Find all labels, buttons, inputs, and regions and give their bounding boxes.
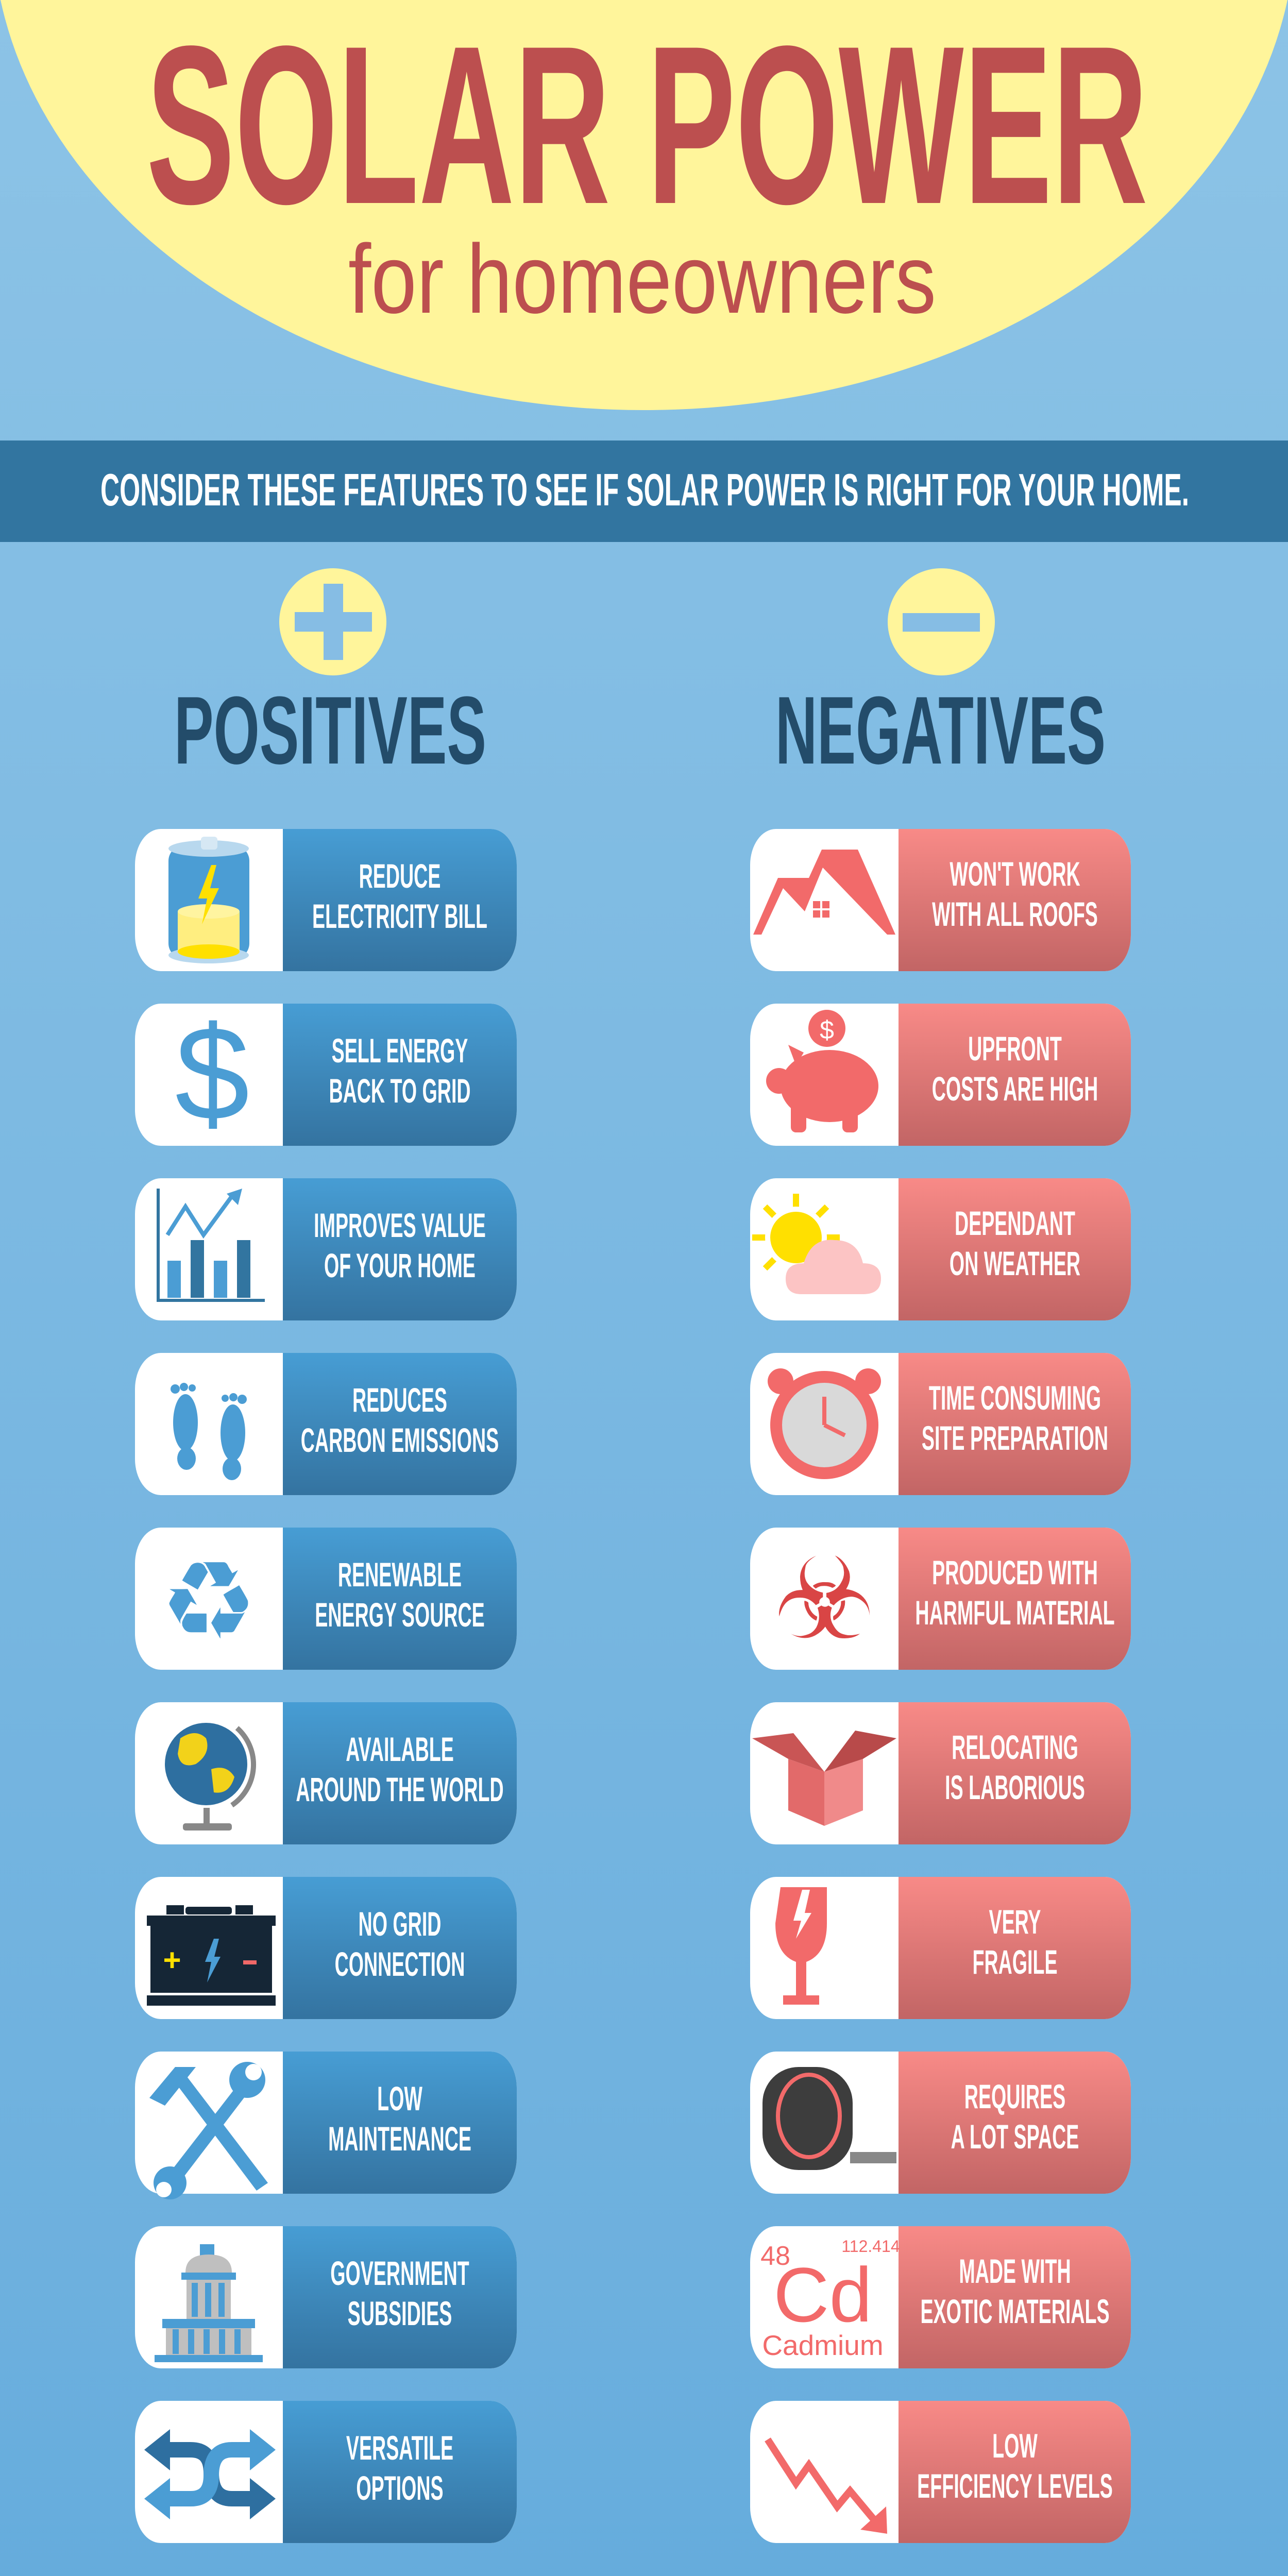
card: low maintenance	[135, 2052, 517, 2199]
card: renewable	[135, 1528, 517, 1670]
panel: positives bottom	[135, 1702, 517, 2543]
icon: piggy bank: $	[820, 1015, 834, 1044]
header section	[0, 0, 1288, 784]
icon: cadmium element	[760, 2237, 900, 2361]
card: time consuming: TIME CONSUMING	[929, 1379, 1101, 1417]
icon: biohazard: ☣	[773, 1536, 875, 1663]
card: harmful material: PRODUCED WITH	[932, 1554, 1098, 1592]
card: carbon emissions: REDUCES	[352, 1381, 447, 1419]
card: available world: AVAILABLE	[346, 1731, 454, 1769]
card: no grid	[135, 1877, 517, 2019]
icon: cadmium element: 112.414	[841, 2237, 900, 2256]
card: low maintenance: LOW	[377, 2080, 422, 2118]
card: time consuming	[750, 1353, 1131, 1495]
heading: positives: POSITIVES	[174, 676, 486, 784]
card: cadmium: MADE WITH	[959, 2252, 1071, 2291]
card: reduce electricity bill: ELECTRICITY BILL	[312, 897, 487, 936]
card: upfront costs: COSTS ARE HIGH	[932, 1070, 1098, 1108]
icon: tape measure	[762, 2067, 896, 2170]
card: fragile: VERY	[989, 1903, 1041, 1941]
card: low maintenance: MAINTENANCE	[328, 2120, 471, 2158]
card: roofs: WITH ALL ROOFS	[932, 895, 1098, 934]
cards section 2	[135, 1702, 1131, 2543]
card: government	[135, 2226, 517, 2368]
icon: alarm clock	[768, 1368, 881, 1479]
icon: chart	[157, 1189, 265, 1302]
card: efficiency: EFFICIENCY LEVELS	[917, 2467, 1113, 2505]
card: fragile	[750, 1877, 1131, 2019]
card: relocating: IS LABORIOUS	[945, 1769, 1085, 1807]
card: fragile: FRAGILE	[972, 1943, 1058, 1981]
card: efficiency: LOW	[992, 2427, 1038, 2465]
card: no grid: NO GRID	[359, 1905, 441, 1943]
card: weather: ON WEATHER	[950, 1245, 1080, 1283]
banner	[0, 440, 1288, 542]
icon: footprints	[171, 1383, 247, 1480]
icon: globe	[165, 1723, 253, 1831]
icon: roof	[753, 850, 895, 935]
card: versatile: OPTIONS	[356, 2469, 444, 2507]
card: available world	[135, 1702, 517, 1844]
card: space: A LOT SPACE	[951, 2118, 1079, 2156]
icon: sun and cloud	[752, 1194, 881, 1294]
card: time consuming: SITE PREPARATION	[922, 1419, 1108, 1458]
card: renewable: RENEWABLE	[338, 1556, 462, 1594]
panel: negatives top	[750, 829, 1131, 1670]
icon: cadmium element: Cd	[773, 2251, 872, 2338]
card: relocating: RELOCATING	[952, 1728, 1078, 1767]
icon: down arrow	[768, 2439, 887, 2534]
panel: negatives bottom	[750, 1702, 1131, 2543]
icon: box	[752, 1731, 896, 1826]
icon: minus	[888, 568, 995, 675]
card: roofs	[750, 829, 1131, 971]
icon: tools	[149, 2062, 268, 2199]
card: versatile	[135, 2401, 517, 2543]
subtitle: for homeowners	[348, 225, 936, 334]
icon: cadmium element: Cadmium	[762, 2329, 884, 2361]
card: weather	[750, 1178, 1131, 1320]
card: sell energy	[135, 999, 517, 1148]
panel: positives top	[135, 829, 517, 1670]
card: carbon emissions	[135, 1353, 517, 1495]
icon: recycle: ♻	[160, 1540, 257, 1662]
card: improves value: OF YOUR HOME	[324, 1247, 476, 1285]
card: available world: AROUND THE WORLD	[296, 1771, 504, 1809]
cards section 1	[135, 829, 1131, 1670]
card: carbon emissions: CARBON EMISSIONS	[301, 1421, 499, 1460]
icon: capitol	[155, 2244, 263, 2362]
card: cadmium: EXOTIC MATERIALS	[920, 2293, 1110, 2331]
icon: dollar: $	[175, 999, 249, 1148]
icon: piggy bank	[766, 1010, 878, 1132]
sun header	[0, 0, 1288, 410]
card: versatile: VERSATILE	[346, 2429, 453, 2467]
card: relocating	[750, 1702, 1131, 1844]
card: space: REQUIRES	[964, 2078, 1065, 2116]
card: reduce electricity bill: REDUCE	[359, 857, 440, 895]
card: cadmium	[750, 2226, 1131, 2368]
card: government: GOVERNMENT	[330, 2255, 469, 2293]
card: government: SUBSIDIES	[348, 2295, 452, 2333]
icon: battery	[168, 837, 249, 963]
card: reduce electricity bill	[135, 829, 517, 971]
card: harmful material: HARMFUL MATERIAL	[915, 1594, 1115, 1632]
icon: car battery	[147, 1905, 276, 2006]
card: efficiency	[750, 2401, 1131, 2543]
icon: cadmium element: 48	[760, 2241, 790, 2271]
card: upfront costs: UPFRONT	[968, 1030, 1062, 1068]
card: sell energy: BACK TO GRID	[329, 1072, 471, 1110]
card: roofs: WON'T WORK	[950, 855, 1080, 893]
card: no grid: CONNECTION	[335, 1945, 465, 1984]
card: renewable: ENERGY SOURCE	[315, 1596, 485, 1634]
card: improves value: IMPROVES VALUE	[314, 1207, 486, 1245]
icon: plus	[279, 568, 386, 675]
card: upfront costs	[750, 1004, 1131, 1146]
card: improves value	[135, 1178, 517, 1320]
card: sell energy: SELL ENERGY	[332, 1032, 468, 1070]
icon: shuffle arrows	[144, 2429, 276, 2519]
icon: car battery: +	[163, 1943, 181, 1977]
card: weather: DEPENDANT	[955, 1205, 1075, 1243]
card: harmful material	[750, 1528, 1131, 1670]
icon: broken glass	[775, 1887, 827, 2005]
card: space	[750, 2052, 1131, 2194]
